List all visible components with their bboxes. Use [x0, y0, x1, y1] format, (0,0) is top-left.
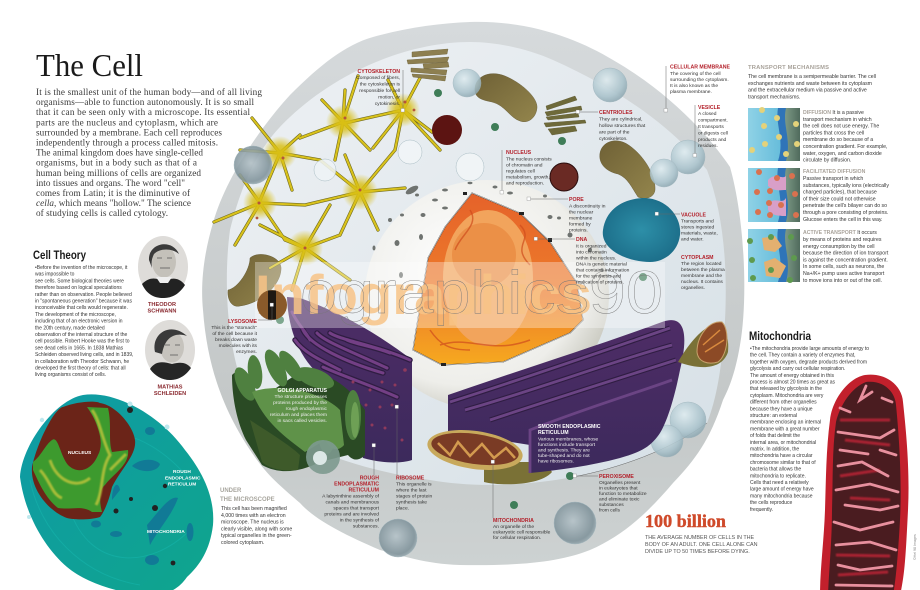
callout: lysosome: molecules with its — [219, 343, 258, 349]
callout: vesicle: compartment. — [698, 118, 728, 124]
callout: cytoskeleton: responsible for cell — [359, 88, 400, 94]
mitochondria text: structure: an external — [750, 413, 797, 419]
cell theory text: The development of the microscope, — [35, 312, 116, 318]
mitochondria text: glycolysis and carry out cellular respiration. — [750, 366, 845, 372]
callout: ribosome: This organelle is — [396, 482, 432, 488]
callout: rough endoplasmic reticulum: spaces that transport — [333, 506, 380, 512]
text: facilitated diffusion: charged particles), that because — [803, 190, 877, 196]
text: diffusion: circulate by diffusion. — [803, 158, 851, 164]
mitochondria text: different from other organelles — [750, 400, 817, 406]
organelle: vacuole — [603, 198, 680, 262]
callout: dna: within the nucleus. — [576, 256, 616, 262]
mitochondria text: chromosome similar to that of — [750, 460, 816, 466]
callout: peroxisome: function to metabolize — [599, 491, 647, 497]
text: diffusion: water, oxygen, and carbon dioxide — [803, 151, 882, 157]
heading: cell theory: Cell Theory — [33, 250, 86, 262]
callout: cytoskeleton: cytokinesis. — [375, 101, 400, 107]
intro text block: cella, which means "hollow." The science — [36, 198, 191, 208]
mitochondria text: cytoplasm. Mitochondria are very — [750, 393, 824, 399]
callout: golgi apparatus: GOLGI APPARATUS — [278, 388, 328, 394]
callout: nucleus — [500, 150, 552, 194]
heading: Mitochondria — [749, 331, 812, 343]
text: diffusion: transport mechanism in which — [803, 117, 872, 123]
callout: golgi apparatus: in sacs called vesicles. — [278, 418, 327, 424]
callout: vacuole: Transports and — [681, 218, 714, 224]
cell theory text: observation of the internal structure of the — [35, 332, 127, 338]
callout: dna — [534, 237, 630, 286]
intro text block: organisms—able to function autonomously. It is so small — [36, 97, 254, 107]
text: active transport: Na+/K+ pump uses active transport — [803, 271, 885, 277]
intro: and the extracellular medium via passive and active — [748, 88, 867, 94]
organelle: lysosome — [257, 290, 287, 320]
cell theory text: see dead cells in 1665. In 1838 Mathias — [35, 345, 124, 351]
labels: RETICULUM — [168, 482, 196, 488]
cell theory text: developed the first theory of cells: that all — [35, 366, 126, 372]
main cell illustration — [202, 22, 744, 565]
cell theory text: see cells. Some biological theories were — [35, 278, 124, 284]
callout: mitochondria: for cellular respiration. — [493, 535, 541, 541]
callout: mitochondria: MITOCHONDRIA — [493, 518, 534, 524]
intro text block: surrounded by a membrane. Each cell reproduces — [36, 127, 222, 137]
text block: under the microscope: THE MICROSCOPE — [220, 497, 275, 503]
callout: peroxisome: substances — [599, 502, 624, 508]
organelle: olive mitochondria — [228, 74, 655, 306]
callout: 100 billion: 100 billion — [645, 511, 726, 531]
callout: golgi apparatus: reticulum and places them — [270, 412, 327, 418]
organelle: vesicles — [234, 68, 706, 557]
labels: ROUGH — [173, 469, 191, 475]
cell theory text: inconceivable that cells would regenerate. — [35, 305, 128, 311]
cell theory text: in "spontaneous generation" because it was — [35, 298, 132, 304]
callout: pore — [527, 197, 606, 234]
watermark: Infographics — [255, 263, 592, 326]
intro text block — [36, 87, 264, 218]
text: diffusion: membrane do so because of a — [803, 137, 873, 143]
callout: peroxisome: from cells — [599, 508, 620, 514]
callout: centrioles: cytoskeleton. — [599, 136, 628, 142]
callout: centrioles — [576, 110, 646, 142]
mitochondria text: Cells that need a relatively — [750, 480, 809, 486]
callout: cytoplasm: CYTOPLASM — [681, 255, 713, 261]
mitochondria text: matrix. In addition, the — [750, 446, 799, 452]
callout: cytoplasm — [681, 255, 725, 291]
cell theory text: was impossible to — [35, 272, 75, 278]
text: active transport: is against the concentration gradient. — [803, 257, 888, 263]
organelle: green peroxisome dots — [276, 89, 647, 509]
callout: cytoskeleton: motion, or — [378, 94, 400, 100]
mitochondria text: •The mitochondria provide large amounts of energy to — [750, 346, 869, 352]
mitochondria text: frequently. — [750, 507, 773, 513]
callout: vesicle: or digests cell — [698, 130, 728, 136]
mitochondria text: internal area, or mitochondrial — [750, 440, 816, 446]
callout: pore: A discontinuity in — [569, 204, 606, 210]
text block: under the microscope: This cell has been magnified — [221, 506, 287, 512]
panel: mitochondria — [749, 331, 909, 590]
organelle: golgi apparatus — [230, 346, 365, 471]
organelle: brown mitochondrion — [425, 425, 525, 475]
name label: SCHWANN — [148, 308, 176, 314]
text: active transport: It occurs — [857, 230, 877, 236]
text: diffusion: the cell does not use energy. The — [803, 124, 879, 130]
cell theory text: rather than on observation. People believed — [35, 292, 132, 298]
illustration: mitochondrion — [820, 375, 909, 590]
callout: lysosome: This is the "stomach" — [211, 325, 257, 331]
organelle: smooth endoplasmic reticulum — [448, 320, 684, 484]
callout: centrioles: CENTRIOLES — [599, 110, 633, 116]
cell theory text: living organisms consist of cells. — [35, 372, 106, 378]
text block: under the microscope: typical organelles in the green- — [221, 533, 292, 539]
callout: cytoskeleton — [356, 68, 404, 112]
text: facilitated diffusion: penetrate the cell's bilayer can do so — [803, 203, 887, 209]
cell theory text: Schleiden observed living cells, and in 1839, — [35, 352, 133, 358]
callout: cytoplasm: organelles. — [681, 285, 705, 291]
callout: peroxisome: PEROXISOME — [599, 474, 634, 480]
callout: cellular membrane: It is also known as the — [670, 83, 718, 89]
callout: cellular membrane: surrounding the cytoplasm. — [670, 77, 729, 83]
callout: peroxisome: Organelles present — [599, 480, 641, 486]
mitochondria text: large amount of energy have — [750, 487, 814, 493]
callout: lysosome: breaks down waste — [215, 337, 257, 343]
mitochondria text: because they have a unique — [750, 406, 813, 412]
callout: golgi apparatus: rough endoplasmic — [286, 406, 328, 412]
intro text block: comes from Latin; it is the diminutive of — [36, 188, 191, 198]
text: diffusion: particles that cross the cell — [803, 130, 864, 136]
intro: transport mechanisms. — [748, 94, 800, 100]
callout: vesicle: products and — [698, 137, 727, 143]
intro: exchanges nutrients and waste between its cytoplasm — [748, 81, 872, 87]
mitochondria text: The amount of energy obtained in this — [750, 373, 834, 379]
text block: under the microscope: microscope. The nucleus is — [221, 520, 284, 526]
icon: facilitated diffusion — [748, 168, 800, 222]
mitochondria text: the cells reproduce — [750, 500, 792, 506]
callout: pore: formed by — [569, 222, 591, 228]
text: facilitated diffusion: of their size could not otherwise — [803, 196, 876, 202]
nuclear pores — [372, 182, 604, 278]
callout: pore: the nuclear — [569, 210, 594, 216]
mitochondria text: mitochondria have a circular — [750, 453, 813, 459]
mitochondria text: many mitochondria because — [750, 493, 813, 499]
callout: vacuole — [655, 212, 718, 242]
panel: transport mechanisms — [747, 65, 889, 284]
callout: nucleus: regulates cell — [506, 168, 535, 174]
icon: diffusion — [748, 107, 800, 161]
organelle: right centriole — [544, 96, 586, 135]
mitochondria text: process is almost 20 times as great as — [750, 380, 836, 386]
callout: ribosome: RIBOSOME — [396, 476, 425, 482]
cell theory text: •Before the invention of the microscope, it — [35, 265, 128, 271]
portrait: Theodor Schwann — [138, 236, 188, 314]
callout: dna: It is organized — [576, 244, 607, 250]
callout: dna: replication of proteins. — [576, 280, 624, 286]
callout: smooth endoplasmic reticulum: SMOOTH ENDOPLASMIC — [538, 424, 601, 430]
cytoplasm — [227, 42, 726, 485]
callouts — [211, 64, 730, 541]
cell theory text: therefore based on logical speculations — [35, 285, 122, 291]
name label: MATHIAS — [157, 384, 183, 390]
callout: golgi apparatus: proteins produced by the — [273, 400, 327, 406]
watermark: ographics90 — [300, 259, 663, 326]
labels: NUCLEUS — [68, 450, 92, 456]
intro text block: independently through a process called mitosis. — [36, 138, 218, 148]
callout: smooth endoplasmic reticulum: functions include transport — [538, 442, 596, 448]
callout: cytoskeleton: Composed of fibers, — [356, 75, 400, 81]
cell theory text: in collaboration with Theodor Schwann, he — [35, 359, 129, 365]
callout: 100 billion: BODY OF AN ADULT. ONE CELL ALONE CAN — [645, 542, 758, 548]
text: active transport: to move ions into or out of the cell. — [803, 278, 882, 284]
callout: centrioles: hollow structures that — [599, 123, 646, 129]
callout: cytoplasm: membrane and the — [681, 273, 722, 279]
callout: lysosome: of the cell because it — [212, 331, 258, 337]
cell membrane rim — [202, 22, 744, 565]
callout: centrioles: are part of the — [599, 130, 630, 136]
callout: dna: for the synthesis and — [576, 274, 621, 280]
mitochondria text: bacteria that allows the — [750, 467, 801, 473]
callout: vesicle: A closed — [698, 111, 717, 117]
intro text block: It is the smallest unit of the human body—and of all living — [36, 87, 262, 97]
text block: under the microscope: UNDER — [220, 488, 242, 494]
callout: smooth endoplasmic reticulum: and synthesis. They are — [538, 448, 590, 454]
callout: cytoplasm: nucleus. It contains — [681, 279, 723, 285]
callout: vacuole: VACUOLE — [681, 212, 707, 218]
callout: rough endoplasmic reticulum: ROUGH — [360, 476, 379, 482]
callout: mitochondria: eukaryotic cell responsible — [493, 530, 551, 536]
callout: nucleus: metabolism, growth, — [506, 174, 550, 180]
callout: rough endoplasmic reticulum: canals and membranous — [325, 500, 380, 506]
mitochondria text: mitochondria to replicate. — [750, 473, 806, 479]
icon: active transport — [747, 229, 800, 283]
text: facilitated diffusion: Passive transport in which — [803, 176, 863, 182]
callout: nucleus: of chromatin and — [506, 162, 543, 168]
mitochondria text: membrane enclosing an internal — [750, 420, 821, 426]
callout: centrioles: They are cylindrical, — [599, 116, 642, 122]
callout: ribosome: synthesis take — [396, 500, 427, 506]
text block: under the microscope: clearly visible, along with some — [221, 526, 292, 532]
callout: ribosome: place. — [396, 506, 409, 512]
portrait: Mathias Schleiden — [145, 320, 195, 397]
callout: lysosome: LYSOSOME — [228, 319, 258, 325]
callout: cytoskeleton: CYTOSKELETON — [358, 69, 400, 75]
callout: cytoplasm: between the plasma — [681, 267, 725, 273]
intro text block: of studying cells is called cytology. — [36, 208, 168, 218]
callout: smooth endoplasmic reticulum: tube-shaped and do not — [538, 453, 590, 459]
credit: ©Hel 98 Images — [913, 534, 917, 560]
callout: mitochondria — [491, 460, 551, 541]
callout: mitochondria: An organelle of the — [493, 524, 534, 530]
organelle: top centriole — [407, 49, 449, 81]
mitochondria text: membrane with a great number — [750, 426, 820, 432]
text block: under the microscope: 4,000 times with an electron — [221, 513, 286, 519]
callout: cytoskeleton: the cytoskeleton is — [360, 82, 401, 88]
callout: ribosome: stages of protein — [396, 494, 432, 500]
text: active transport: by means of proteins and requires — [803, 237, 882, 243]
callout: ribosome — [395, 405, 432, 512]
nucleus — [32, 402, 135, 519]
panel: cell theory — [33, 250, 135, 378]
intro text block: that it can be seen only with a microscope. Its essential — [36, 107, 250, 117]
text: facilitated diffusion: substances, typically ions (electrically — [803, 183, 889, 189]
organelle: dark red lysosomes — [432, 115, 630, 442]
mitochondria text: the cell. They contain a variety of enzymes that, — [750, 353, 856, 359]
callout: peroxisome: in eukaryotes that — [599, 486, 638, 492]
text: active transport: because the direction of ion transport — [803, 251, 889, 257]
intro text block: into tissues and organs. The word "cell" — [36, 178, 185, 188]
callout: dna: DNA — [576, 237, 587, 243]
cell theory text: the 20th century, made detailed — [35, 325, 105, 331]
intro text block: organisms, but in a body such as that of a — [36, 158, 197, 168]
intro text block: The animal kingdom does have single-celled — [36, 148, 203, 158]
callout: vesicle: It transports — [698, 124, 724, 130]
callout: vesicle: residues. — [698, 143, 718, 149]
callout: peroxisome: and eliminate toxic — [599, 496, 640, 502]
text: active transport: energy consumption by the cell — [803, 244, 875, 250]
callout: nucleus: The nucleus consists — [506, 156, 552, 162]
text: facilitated diffusion: through a pore consisting of proteins. — [803, 210, 888, 216]
callout: golgi apparatus — [270, 388, 328, 424]
cell theory text: including that of an electronic version in — [35, 319, 123, 325]
callout: cellular membrane: CELLULAR MEMBRANE — [670, 64, 730, 70]
callout: smooth endoplasmic reticulum: RETICULUM — [538, 430, 569, 436]
mitochondria text: together with oxygen, degrade products derived from — [750, 359, 867, 365]
organelle: nucleus — [365, 180, 609, 410]
text: diffusion: It is a passive — [832, 110, 864, 116]
callout: peroxisome — [573, 474, 647, 514]
callout: rough endoplasmic reticulum: in the synthesis of — [340, 518, 380, 524]
callout: lysosome: enzymes. — [236, 350, 257, 355]
callout: dna: DNA is genetic material — [576, 262, 627, 268]
cytoskeleton star network — [214, 76, 440, 290]
callout: dna: into chromatin — [576, 250, 607, 256]
callout: vacuole: stores ingested — [681, 224, 714, 230]
callout: dna: that contains information — [576, 268, 630, 274]
mitochondria text: of folds that delimit the — [750, 433, 800, 439]
callout: rough endoplasmic reticulum: substances. — [353, 524, 379, 530]
title: The Cell — [36, 47, 143, 83]
callout: rough endoplasmic reticulum — [322, 444, 380, 530]
callout: smooth endoplasmic reticulum: have ribosomes. — [538, 458, 574, 464]
callout: vacuole: and water. — [681, 236, 704, 242]
intro text block: human being millions of cells are organized — [36, 168, 201, 178]
callout: smooth endoplasmic reticulum: Various membranes, whose — [538, 436, 599, 442]
illustration: cell under the microscope — [20, 394, 213, 590]
callout: 100 billion — [645, 511, 758, 555]
callout: rough endoplasmic reticulum: RETICULUM — [348, 488, 379, 494]
name label: THEODOR — [148, 302, 176, 308]
text: diffusion: DIFFUSION — [803, 110, 832, 116]
text: facilitated diffusion: Glucose enters the cell in this way. — [803, 217, 882, 223]
callout: pore: proteins. — [569, 228, 588, 234]
callout: vacuole: materials, waste, — [681, 230, 718, 236]
callout: smooth endoplasmic reticulum — [538, 424, 601, 464]
callout: nucleus: and reproduction. — [506, 180, 544, 186]
callout: cellular membrane: plasma membrane. — [670, 89, 712, 95]
name label: SCHLEIDEN — [154, 391, 186, 397]
intro: The cell membrane is a semipermeable barrier. The cell — [748, 74, 876, 80]
text: facilitated diffusion: FACILITATED DIFFUSION — [803, 169, 866, 175]
callout: lysosome — [211, 303, 274, 355]
callout: 100 billion: THE AVERAGE NUMBER OF CELLS IN THE — [645, 535, 755, 541]
callout: vesicle — [693, 105, 728, 157]
organelle: golgi vesicle — [306, 440, 340, 474]
callout: golgi apparatus: The structure processes — [275, 394, 328, 400]
heading: TRANSPORT MECHANISMS — [748, 65, 829, 71]
text block: under the microscope — [220, 488, 292, 546]
callout: rough endoplasmic reticulum: ENDOPLASMATIC — [334, 482, 379, 488]
callout: cellular membrane — [664, 64, 730, 112]
labels: ENDOPLASMIC — [165, 476, 201, 482]
text: active transport: In some cells, such as neurons, the — [803, 264, 884, 270]
text: active transport: ACTIVE TRANSPORT — [803, 230, 857, 236]
callout: pore: membrane — [569, 216, 593, 222]
text block: under the microscope: colored cytoplasm. — [221, 540, 264, 546]
mitochondria text: that released by glycolysis in the — [750, 386, 822, 392]
callout: cytoplasm: The region located — [681, 261, 722, 267]
callout: cellular membrane: The covering of the cell — [670, 71, 721, 77]
labels: MITOCHONDRIA — [147, 529, 185, 535]
callout: rough endoplasmic reticulum: proteins and are involved — [324, 512, 379, 518]
organelle: rough endoplasmic reticulum — [287, 297, 412, 462]
cell theory text: cell possible. Robert Hooke was the first to — [35, 339, 130, 345]
intro text block: parts are the nucleus and cytoplasm, which are — [36, 117, 218, 127]
callout: nucleus: NUCLEUS — [506, 150, 532, 156]
callout: 100 billion: DIVIDE UP TO 50 TIMES BEFORE DYING. — [645, 549, 750, 555]
callout: pore: PORE — [569, 197, 584, 203]
callout: ribosome: where the last — [396, 488, 427, 494]
callout: vesicle: VESICLE — [698, 105, 721, 111]
text: diffusion: concentration gradient. For example, — [803, 144, 888, 150]
callout: rough endoplasmic reticulum: A labyrinthine assembly of — [322, 494, 380, 500]
organelle: orange mitochondrion — [678, 322, 728, 367]
